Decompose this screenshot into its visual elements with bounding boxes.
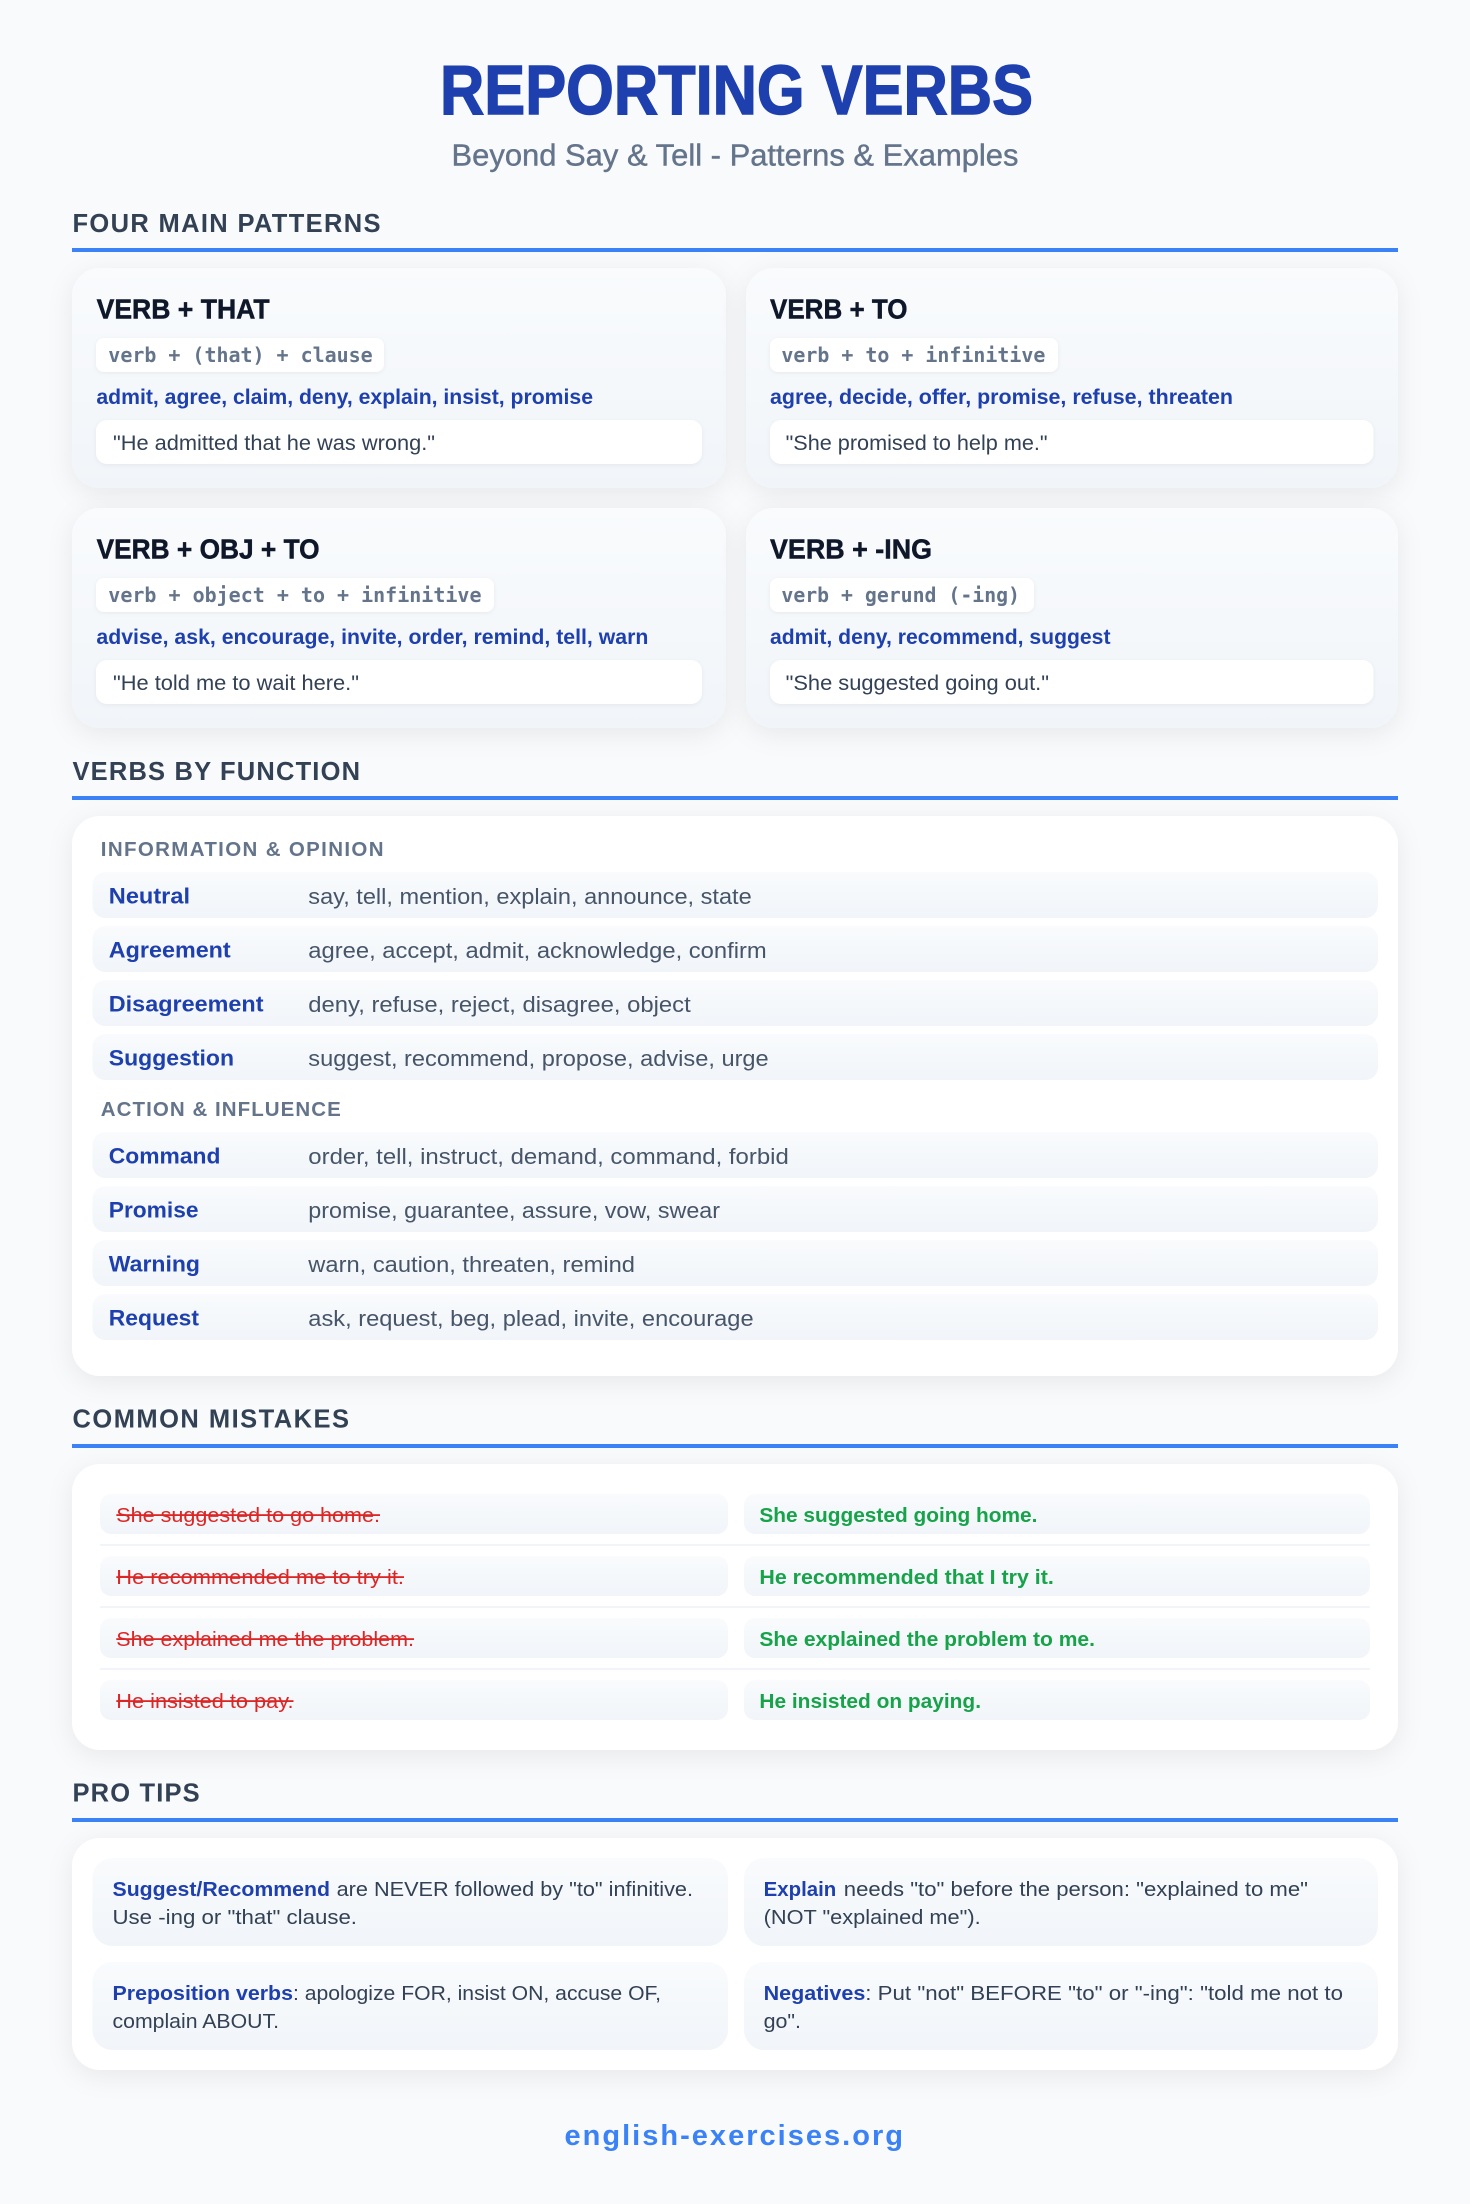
card heading: verb + obj + to: VERB + OBJ + TO [97,533,320,564]
tip: preposition verbs: Preposition verbs [112,1982,293,2005]
section heading: verbs by function [72,758,1398,800]
card heading: verb + to: VERB + TO [770,293,908,324]
section heading: verbs by function: VERBS BY FUNCTION [72,758,360,786]
example: verb + -ing [770,660,1374,704]
verb list: verb + -ing: admit, deny, recommend, suggest [770,626,1110,649]
section heading: common mistakes: COMMON MISTAKES [72,1406,349,1434]
row: warning [92,1240,1378,1286]
row: disagreement [92,980,1378,1026]
tip: explain [744,1858,1378,1946]
example: verb + obj + to: "He told me to wait here." [113,672,359,695]
panel: verbs by function [72,816,1398,1376]
wrong sentence 3: She explained me the problem. [116,1628,414,1651]
correct sentence 3: She explained the problem to me. [759,1628,1095,1651]
wrong sentence 3 [100,1618,728,1658]
formula: verb + obj + to: verb + object + to + infinitive [108,583,482,607]
tip: explain: Explain [764,1878,836,1901]
row: suggestion: Suggestion [109,1046,234,1070]
row: suggestion: suggest, recommend, propose, advise, urge [308,1046,769,1071]
tip: explain: (NOT "explained me"). [764,1906,981,1929]
row: promise [92,1186,1378,1232]
subheading: action and influence: ACTION & INFLUENCE [101,1098,341,1121]
tip: preposition verbs [92,1962,728,2050]
wrong sentence 2 [100,1556,728,1596]
row: command [92,1132,1378,1178]
tip: negatives: : Put "not" BEFORE "to" or "-ing": "told me not to [865,1982,1343,2005]
row: disagreement: Disagreement [109,992,264,1016]
wrong sentence 4: He insisted to pay. [116,1690,294,1713]
example: verb + to: "She promised to help me." [786,432,1048,455]
row: promise: Promise [109,1198,198,1222]
formula: verb + -ing: verb + gerund (-ing) [781,583,1020,607]
tip: negatives [744,1962,1378,2050]
tip: preposition verbs: complain ABOUT. [112,2010,279,2033]
correct sentence 1 [744,1494,1370,1534]
subtitle: Beyond Say & Tell - Patterns & Examples [452,138,1018,173]
example: verb + that: "He admitted that he was wrong." [113,432,435,455]
panel: verb + to [746,268,1398,488]
panel: verb + -ing [746,508,1398,728]
tip: negatives: Negatives [764,1982,865,2005]
row: agreement [92,926,1378,972]
formula: verb + that [96,338,384,372]
row: command: order, tell, instruct, demand, command, forbid [308,1144,789,1169]
verb list: verb + obj + to: advise, ask, encourage, invite, order, remind, tell, warn [96,626,648,649]
row: agreement: Agreement [109,938,231,962]
title: REPORTING VERBS [440,51,1033,129]
section heading: four main patterns [72,210,1398,252]
correct sentence 3 [744,1618,1370,1658]
tip: explain: needs "to" before the person: "explained to me" [844,1878,1308,1901]
example: verb + -ing: "She suggested going out." [786,672,1049,695]
tip: suggest and recommend [92,1858,728,1946]
wrong sentence 4 [100,1680,728,1720]
card heading: verb + that: VERB + THAT [97,293,270,324]
row: neutral: Neutral [109,884,190,908]
panel: verb + that [72,268,726,488]
wrong sentence 1 [100,1494,728,1534]
tip: negatives: go". [764,2010,801,2033]
section heading: four main patterns: FOUR MAIN PATTERNS [72,210,380,238]
tip: suggest and recommend: are NEVER followed by "to" infinitive. [337,1878,693,1901]
formula: verb + -ing [770,578,1034,612]
section heading: pro tips: PRO TIPS [72,1780,200,1808]
panel: pro tips [72,1838,1398,2070]
wrong sentence 2: He recommended me to try it. [116,1566,404,1589]
verb list: verb + that: admit, agree, claim, deny, explain, insist, promise [96,386,593,409]
panel: common mistakes [72,1464,1398,1750]
row: command: Command [109,1144,220,1168]
formula: verb + to [770,338,1058,372]
correct sentence 4 [744,1680,1370,1720]
correct sentence 4: He insisted on paying. [759,1690,981,1713]
section heading: pro tips [72,1780,1398,1822]
row: warning: Warning [109,1252,200,1276]
example: verb + to [770,420,1374,464]
row: warning: warn, caution, threaten, remind [307,1252,635,1277]
row: request [92,1294,1378,1340]
formula: verb + obj + to [96,578,494,612]
row: request: ask, request, beg, plead, invite, encourage [308,1306,754,1331]
formula: verb + that: verb + (that) + clause [108,343,373,367]
card heading: verb + -ing: VERB + -ING [770,533,932,564]
formula: verb + to: verb + to + infinitive [781,343,1045,367]
correct sentence 1: She suggested going home. [759,1504,1037,1527]
correct sentence 2 [744,1556,1370,1596]
tip: suggest and recommend: Use -ing or "that" clause. [112,1906,357,1929]
row: agreement: agree, accept, admit, acknowledge, confirm [308,938,767,963]
row: suggestion [92,1034,1378,1080]
row: disagreement: deny, refuse, reject, disagree, object [308,992,691,1017]
row: neutral [92,872,1378,918]
tip: suggest and recommend: Suggest/Recommend [112,1878,330,1901]
subheading: information and opinion: INFORMATION & OPINION [101,838,384,861]
panel: verb + obj + to [72,508,726,728]
verb list: verb + to: agree, decide, offer, promise, refuse, threaten [770,386,1233,409]
tip: preposition verbs: : apologize FOR, insist ON, accuse OF, [293,1982,661,2005]
row: promise: promise, guarantee, assure, vow, swear [308,1198,720,1223]
section heading: common mistakes [72,1406,1398,1448]
row: neutral: say, tell, mention, explain, announce, state [308,884,752,909]
wrong sentence 1: She suggested to go home. [116,1504,380,1527]
example: verb + that [96,420,702,464]
footer: english-exercises.org [564,2120,903,2152]
row: request: Request [109,1306,200,1330]
correct sentence 2: He recommended that I try it. [759,1566,1054,1589]
example: verb + obj + to [96,660,702,704]
